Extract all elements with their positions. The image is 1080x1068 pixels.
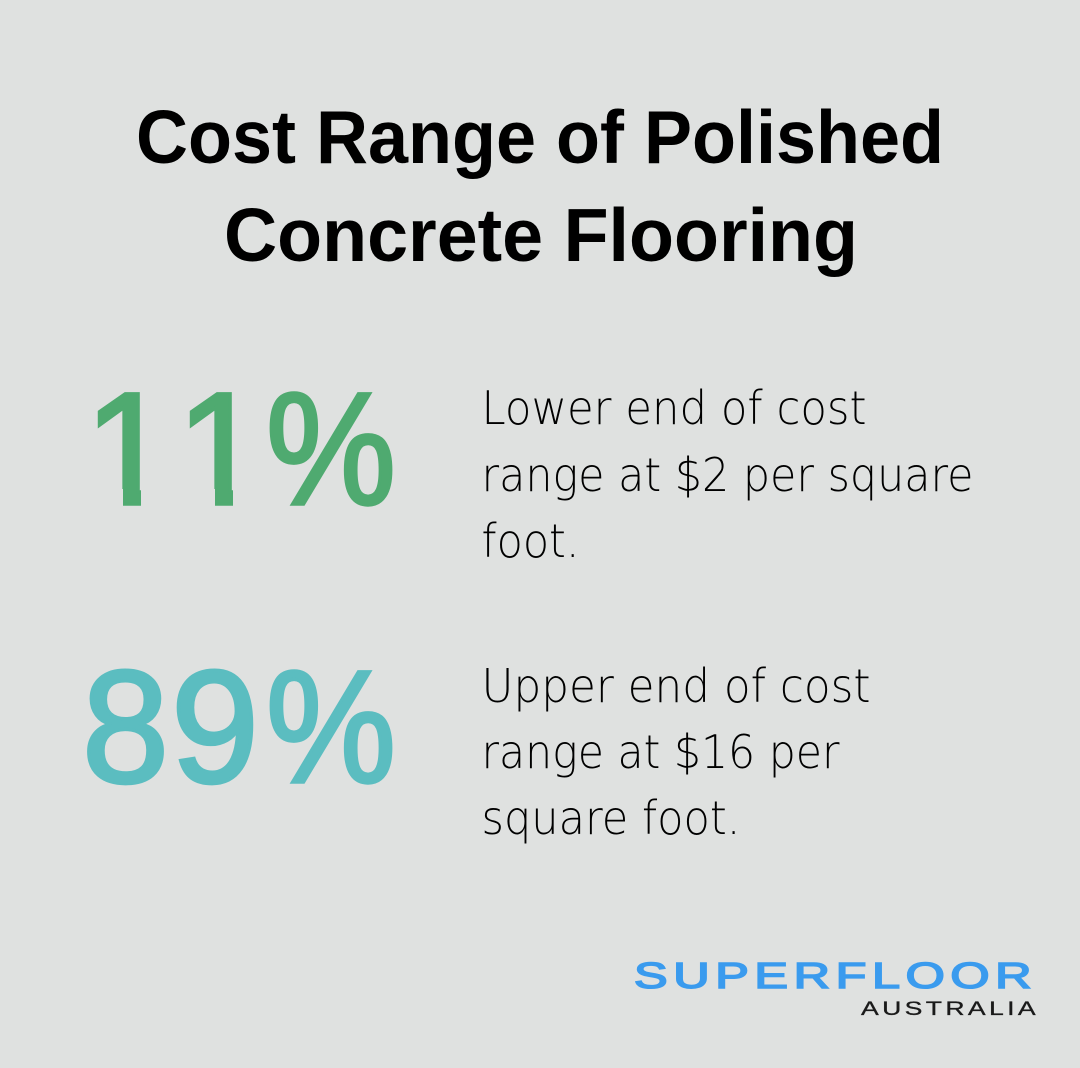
stat description: lower end: range at $2 per square bbox=[482, 448, 974, 502]
stat description: upper end: range at $16 per bbox=[482, 725, 840, 779]
stat value: 11%: 1 bbox=[176, 359, 264, 538]
stat description: lower end: foot. bbox=[482, 514, 580, 568]
stat description: upper end: Upper end of cost bbox=[482, 659, 870, 713]
stat description: lower end: Lower end of cost bbox=[482, 381, 866, 435]
title: Concrete Flooring bbox=[224, 193, 858, 277]
stat value: 89% bbox=[82, 637, 396, 816]
title: Cost Range of Polished bbox=[136, 95, 944, 179]
stat: 89 percent upper end bbox=[82, 637, 870, 845]
stat: 11 percent lower end bbox=[84, 359, 974, 568]
stat value: 89%: 8 bbox=[82, 637, 169, 816]
title bbox=[136, 95, 944, 277]
logo: Superfloor Australia: AUSTRALIA bbox=[861, 998, 1039, 1019]
stat value: 11%: % bbox=[266, 359, 396, 538]
logo: Superfloor Australia: SUPERFLOOR bbox=[634, 956, 1037, 996]
stat description: upper end: square foot. bbox=[482, 791, 740, 845]
stat value: 89%: 9 bbox=[171, 637, 259, 816]
logo: Superfloor Australia bbox=[634, 956, 1039, 1019]
stat description: upper end bbox=[482, 659, 870, 845]
stat value: 11%: 1 bbox=[84, 359, 172, 538]
stat value: 11% bbox=[84, 359, 396, 538]
stat description: lower end bbox=[482, 381, 974, 568]
stat value: 89%: % bbox=[266, 637, 396, 816]
